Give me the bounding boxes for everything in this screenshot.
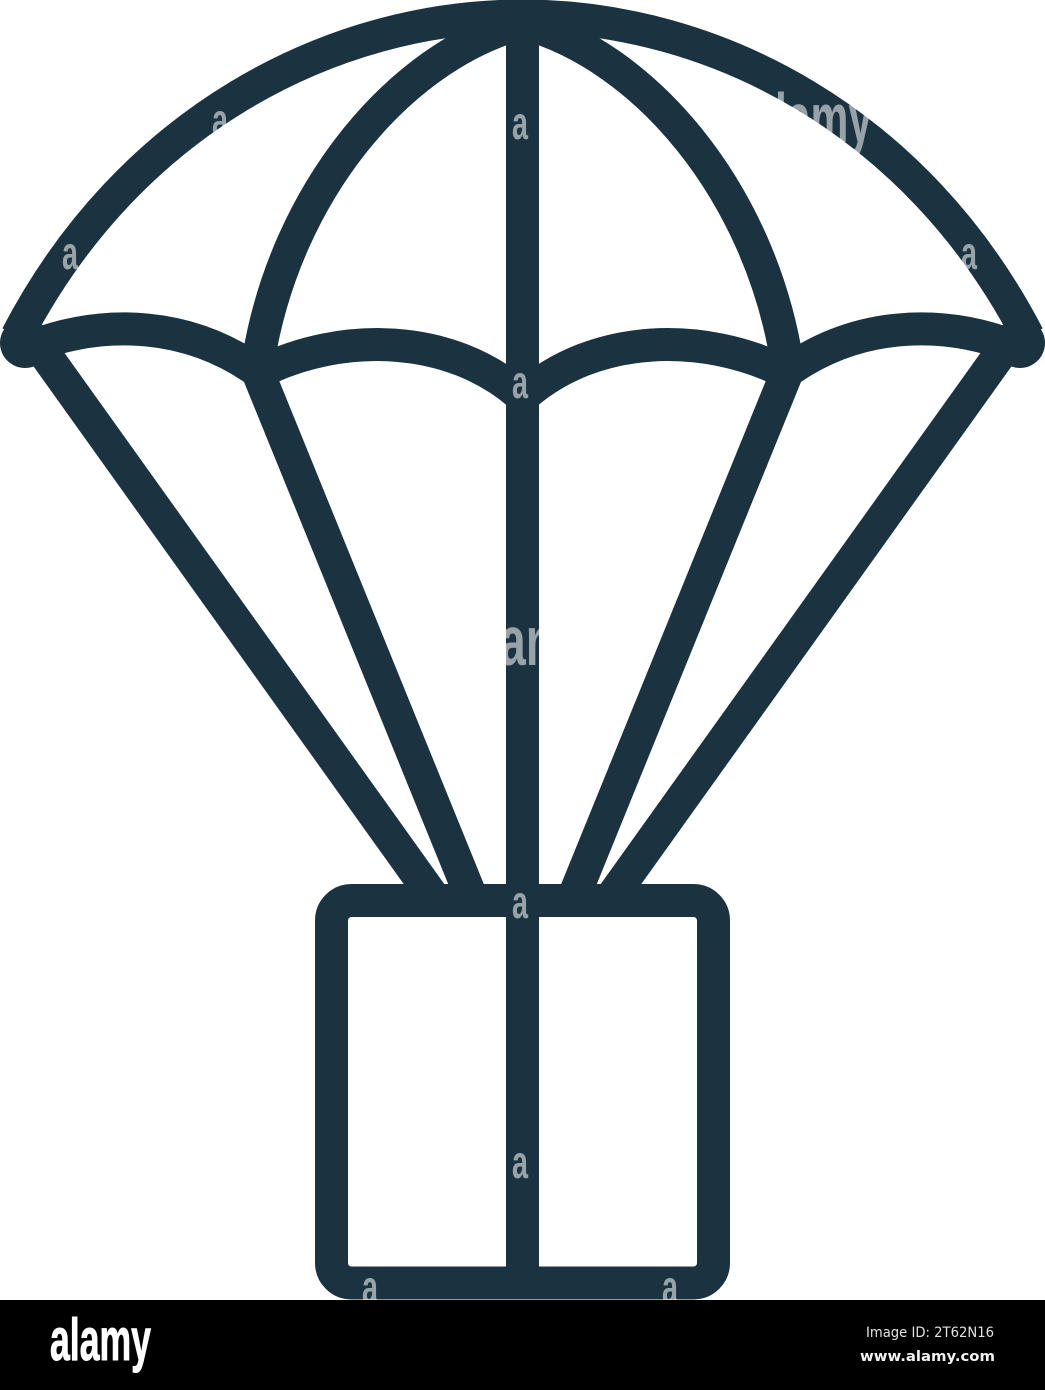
- stock watermark: a: [62, 227, 78, 279]
- stock logo: alamy: [50, 1307, 151, 1373]
- stock watermark: a: [512, 876, 528, 928]
- stock watermark: a: [961, 227, 977, 279]
- stock watermark: a: [512, 97, 528, 149]
- stock watermark: an: [500, 602, 554, 680]
- stock watermark: a: [512, 1136, 528, 1188]
- canopy lower scallops: [30, 329, 1015, 397]
- image id: Image ID: 2T62N16: [866, 1325, 994, 1341]
- canopy outline: [0, 16, 1045, 368]
- stock watermark: lamy: [775, 79, 872, 157]
- stock watermark: a: [212, 94, 228, 146]
- canopy ribs: [245, 23, 800, 383]
- stock watermark: a: [512, 356, 528, 408]
- stock watermark: [62, 79, 977, 1313]
- footer bar: [0, 1300, 1045, 1390]
- website: www.alamy.com: [860, 1348, 995, 1365]
- package box: [332, 900, 714, 1283]
